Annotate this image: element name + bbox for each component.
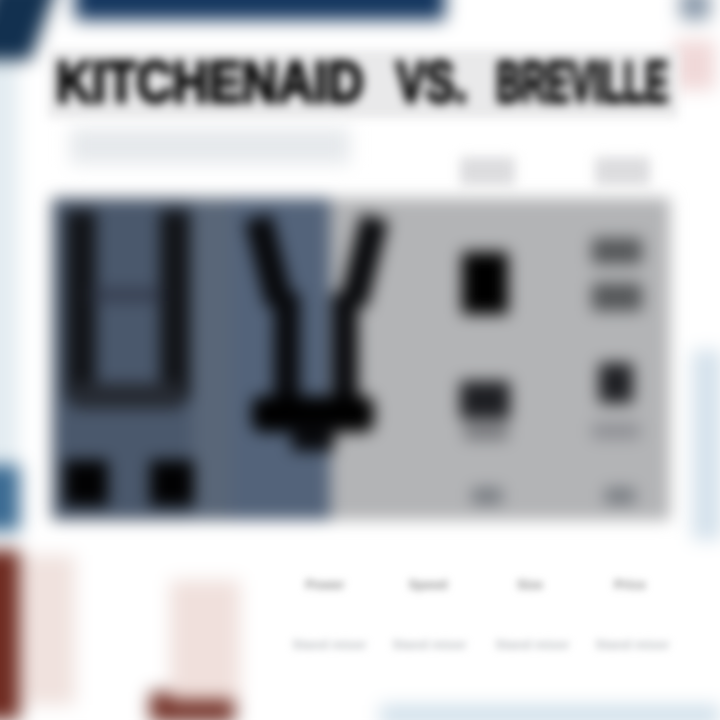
footer text: Stand mixer — [292, 637, 367, 652]
comparison table panel — [52, 198, 670, 520]
product silhouette left — [66, 210, 96, 400]
title word 1: KITCHENAID — [56, 50, 364, 115]
title word 2: VS. — [396, 50, 467, 115]
column headers — [456, 152, 654, 189]
subtitle band — [70, 128, 350, 164]
footer label: Price — [614, 577, 646, 592]
title — [48, 50, 678, 118]
footer text: Stand mixer — [392, 637, 467, 652]
footer text: Stand mixer — [495, 637, 570, 652]
footer label: Size — [517, 577, 543, 592]
product silhouette right — [245, 214, 293, 308]
footer label: Speed — [408, 577, 448, 592]
title word 3: BREVILLE — [496, 50, 668, 115]
dark columns — [52, 198, 330, 520]
footer label: Power — [305, 577, 344, 592]
right column icons — [462, 252, 508, 314]
footer text: Stand mixer — [595, 637, 670, 652]
footer labels row — [290, 576, 670, 652]
